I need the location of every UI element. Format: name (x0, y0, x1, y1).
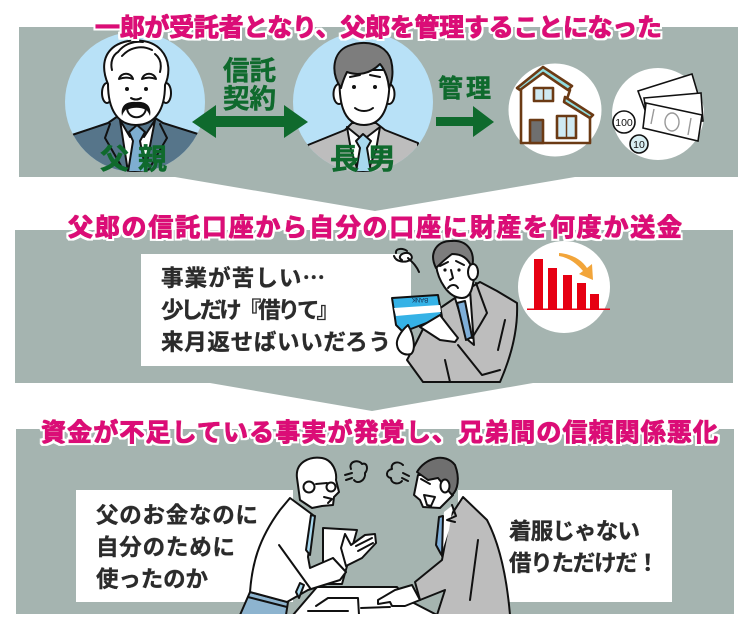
left brother (240, 458, 376, 615)
right brother (378, 458, 510, 615)
icon: money (612, 68, 704, 160)
illustration: arguing brothers (240, 458, 510, 615)
table and documents (293, 587, 437, 615)
panel: step 1 background (19, 27, 738, 211)
callout: accusation: 自分のために (96, 535, 235, 560)
icon: house (508, 64, 602, 156)
callout: reply (458, 490, 672, 602)
icon: worried man with bank book (392, 241, 517, 382)
callout: reply: 着服じゃない (509, 519, 640, 544)
icon: money: 100 (615, 117, 633, 129)
heading: step 1: 一郎が受託者となり、父郎を管理することになった (95, 13, 662, 42)
icon: father (65, 32, 205, 180)
callout: worried thought (141, 254, 411, 366)
label: trust contract (223, 56, 276, 114)
icon: money: 10 (633, 139, 645, 151)
callout: worried thought: 事業が苦しい… (161, 261, 325, 293)
heading: step 2: 父郎の信託口座から自分の口座に財産を何度か送金 (68, 214, 682, 242)
label: father: 父親 (100, 143, 167, 176)
panel: step 3 background (16, 429, 734, 614)
arrow: two-way contract (192, 105, 308, 138)
callout: accusation (76, 490, 293, 602)
callout: accusation: 使ったのか (96, 567, 208, 592)
callout: reply: 借りただけだ！ (509, 551, 659, 576)
icon: worried man with bank book: BANK (412, 296, 428, 302)
label: eldest son: 長男 (330, 144, 396, 176)
panel: step 2 background (15, 230, 733, 411)
label: trust contract: 信託 (223, 56, 276, 86)
label: management: 管理 (438, 75, 491, 103)
callout: worried thought: 少しだけ『借りて』 (161, 298, 339, 323)
label: trust contract: 契約 (223, 84, 276, 114)
icon: declining bar chart (518, 241, 610, 333)
callout: worried thought: 来月返せばいいだろう (161, 330, 391, 355)
arrow: management (436, 106, 494, 137)
anger puffs (345, 461, 409, 483)
heading: step 3: 資金が不足している事実が発覚し、兄弟間の信頼関係悪化 (41, 418, 718, 447)
callout: accusation: 父のお金なのに (96, 503, 258, 528)
icon: eldest son (293, 32, 433, 180)
